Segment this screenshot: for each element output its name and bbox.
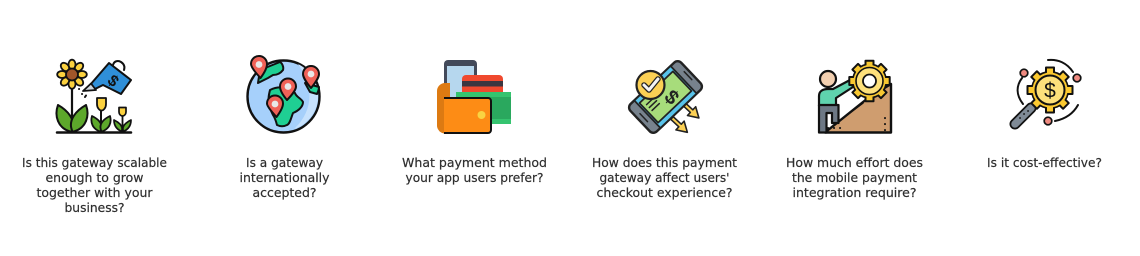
text: payment method question: your app users prefer? — [406, 171, 544, 186]
text: international acceptance question: internationally — [240, 171, 330, 186]
text: scalability question: business? — [64, 201, 124, 216]
icon: wallet with phone, card and cash — [437, 60, 511, 134]
text: international acceptance question: accepted? — [252, 186, 316, 201]
icon: magnifier with dollar gear: $ — [1044, 80, 1056, 102]
text: cost effectiveness question: Is it cost-effective? — [987, 156, 1102, 171]
text: scalability question: Is this gateway scalable — [22, 156, 167, 171]
icon: phone payment with check badge — [627, 59, 704, 137]
icon: person climbing hill with gear — [819, 61, 891, 132]
icon: phone payment with check badge: $ — [660, 86, 683, 109]
text: scalability question: enough to grow — [46, 171, 144, 186]
text: checkout experience question: gateway affect users' — [600, 171, 730, 186]
icon: magnifier with dollar gear — [1015, 60, 1081, 125]
text: integration effort question: integration require? — [792, 186, 916, 201]
text: payment method question: What payment method — [402, 156, 547, 171]
text: integration effort question: How much effort does — [786, 156, 923, 171]
text: checkout experience question: checkout experience? — [596, 186, 732, 201]
icon: flowers and watering can: $ — [104, 72, 122, 91]
icon: globe with location pins — [248, 56, 320, 132]
icon: flowers and watering can — [56, 60, 131, 133]
text: checkout experience question: How does this payment — [592, 156, 737, 171]
text: scalability question: together with your — [36, 186, 153, 201]
text: international acceptance question: Is a gateway — [246, 156, 323, 171]
text: integration effort question: the mobile payment — [792, 171, 917, 186]
